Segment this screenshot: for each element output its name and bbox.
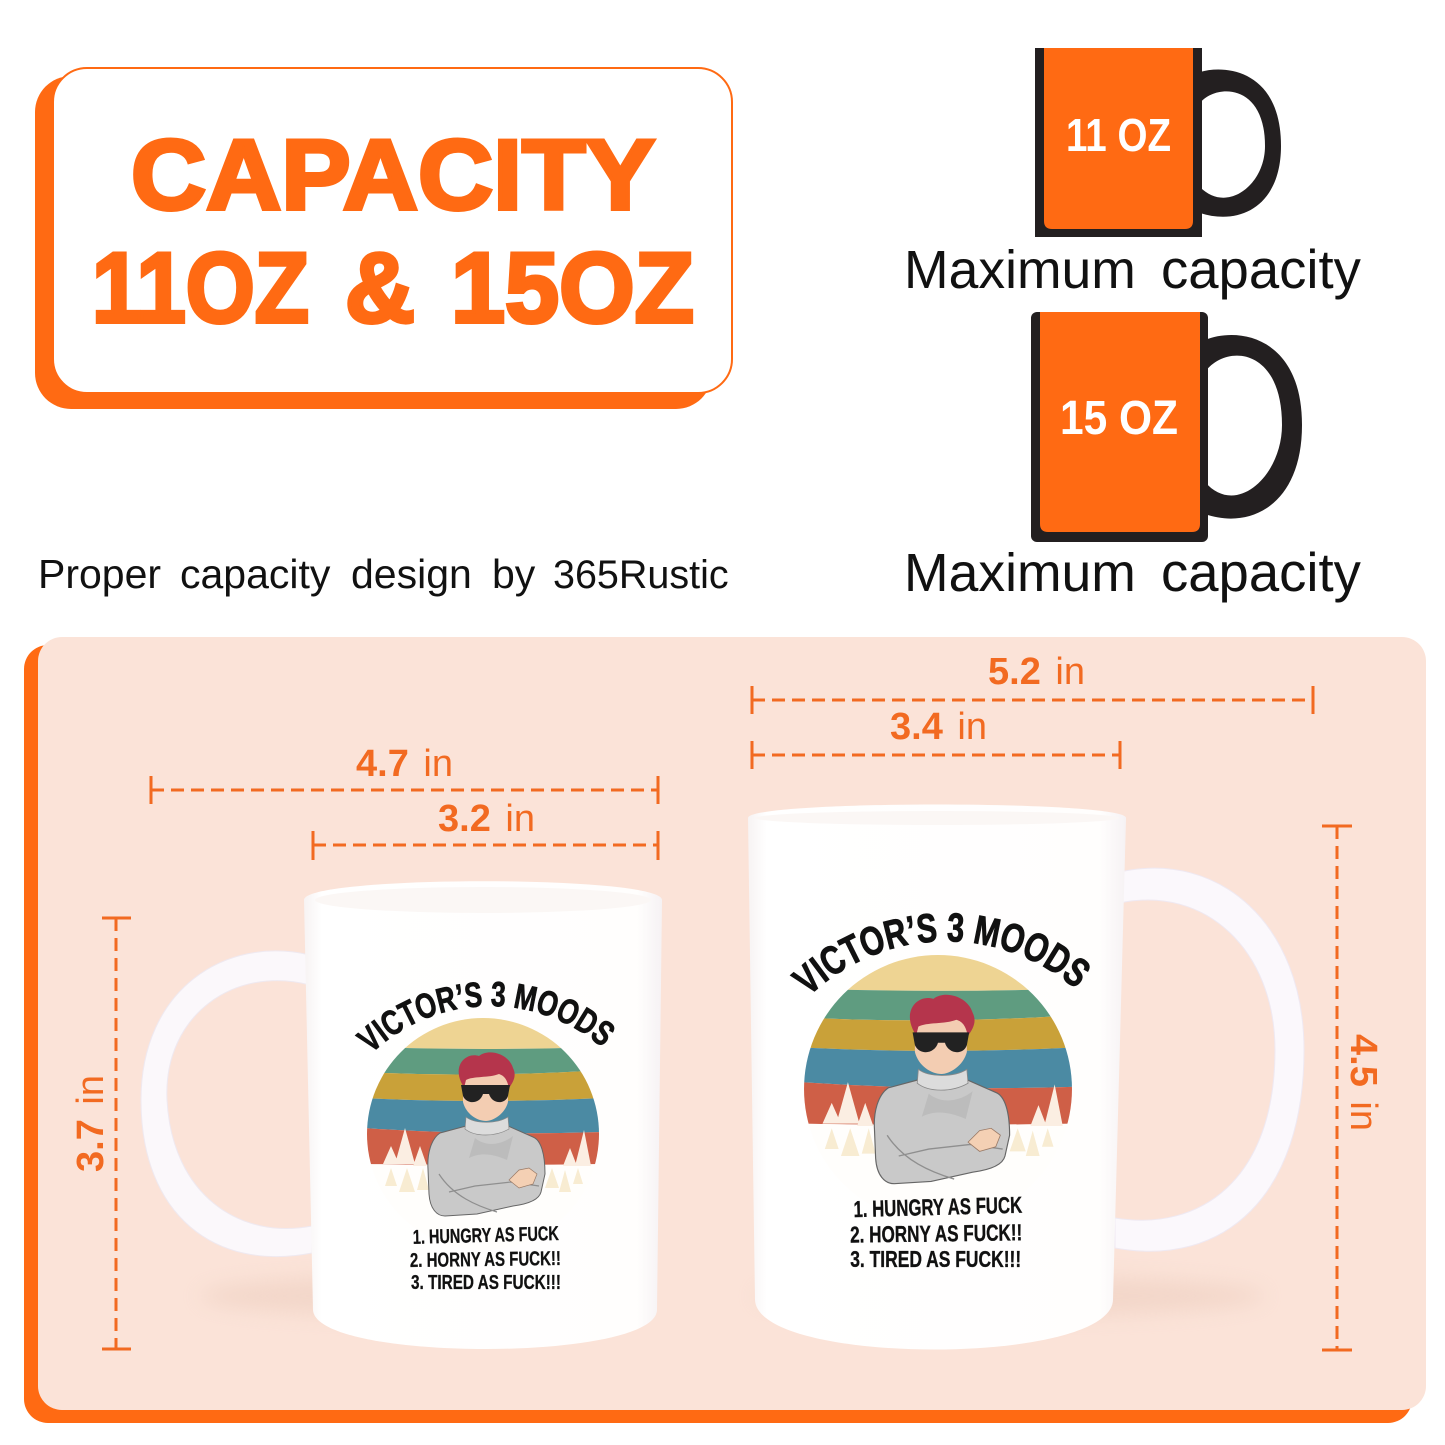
heading: sizes: 11OZ — [92, 232, 309, 343]
mug rim right — [755, 811, 1119, 825]
icon: 15 oz mug — [1031, 312, 1302, 542]
caption: proper capacity design: by — [492, 551, 536, 597]
caption: proper capacity design: design — [351, 551, 472, 597]
curved title right: VICTOR’S 3 MOODS — [790, 912, 1090, 992]
list left — [410, 1223, 561, 1294]
panel: capacity headline — [35, 68, 732, 409]
list left: 3. TIRED AS FUCK!!! — [411, 1272, 561, 1294]
dimension: 4.5 in height: 4.5 in — [1342, 1034, 1384, 1131]
heading: sizes — [92, 232, 694, 343]
caption: proper capacity design: capacity — [180, 551, 331, 597]
label: 11 oz: 11 OZ — [1066, 109, 1171, 161]
photo: 15 oz mug — [748, 804, 1304, 1350]
icon: 11 oz mug — [1035, 48, 1281, 237]
heading: sizes: & — [345, 232, 415, 343]
dimension: 5.2 in width — [752, 651, 1313, 714]
label: maximum capacity 15 oz: Maximum — [904, 544, 1136, 603]
dimension: 4.5 in height — [1322, 826, 1384, 1350]
caption: proper capacity design: 365Rustic — [553, 553, 729, 597]
man illustration left — [428, 1052, 545, 1216]
mug handle left — [141, 951, 312, 1257]
label: maximum capacity 15 oz: capacity — [1161, 542, 1362, 603]
dimension: 3.4 in width: 3.4 in — [890, 706, 987, 748]
label: maximum capacity 11 oz: capacity — [1161, 239, 1362, 300]
dimension: 3.7 in height: 3.7 in — [70, 1075, 112, 1172]
list right: 2. HORNY AS FUCK!! — [850, 1219, 1022, 1248]
list right — [850, 1192, 1023, 1272]
label: 15 oz: 15 OZ — [1060, 392, 1178, 445]
mug rim left — [315, 887, 651, 913]
panel: dimensions background — [24, 637, 1426, 1423]
dimension: 3.2 in width — [313, 798, 658, 860]
dimension: 5.2 in width: 5.2 in — [988, 651, 1085, 693]
dimension: 4.7 in width — [151, 743, 658, 804]
print art left — [354, 981, 614, 1294]
heading: capacity: CAPACITY — [131, 119, 655, 230]
dimension: 3.7 in height — [70, 918, 131, 1349]
mug body right — [748, 804, 1126, 1350]
print art right — [790, 912, 1090, 1272]
list left: 1. HUNGRY AS FUCK — [413, 1223, 559, 1249]
heading: sizes: 15OZ — [451, 232, 694, 343]
dimension: 3.2 in width: 3.2 in — [438, 798, 535, 840]
list left: 2. HORNY AS FUCK!! — [410, 1248, 561, 1272]
mug handle right — [1115, 868, 1304, 1251]
list right: 1. HUNGRY AS FUCK — [853, 1192, 1023, 1222]
man illustration right — [874, 995, 1010, 1184]
photo: 11 oz mug — [140, 881, 662, 1349]
mug body left — [304, 881, 662, 1349]
curved title left: VICTOR’S 3 MOODS — [354, 981, 614, 1050]
dimension: 3.4 in width — [752, 706, 1120, 769]
caption: proper capacity design: Proper — [38, 551, 161, 597]
dimension: 4.7 in width: 4.7 in — [356, 743, 453, 785]
label: maximum capacity 11 oz: Maximum — [904, 241, 1136, 300]
list right: 3. TIRED AS FUCK!!! — [850, 1246, 1021, 1272]
